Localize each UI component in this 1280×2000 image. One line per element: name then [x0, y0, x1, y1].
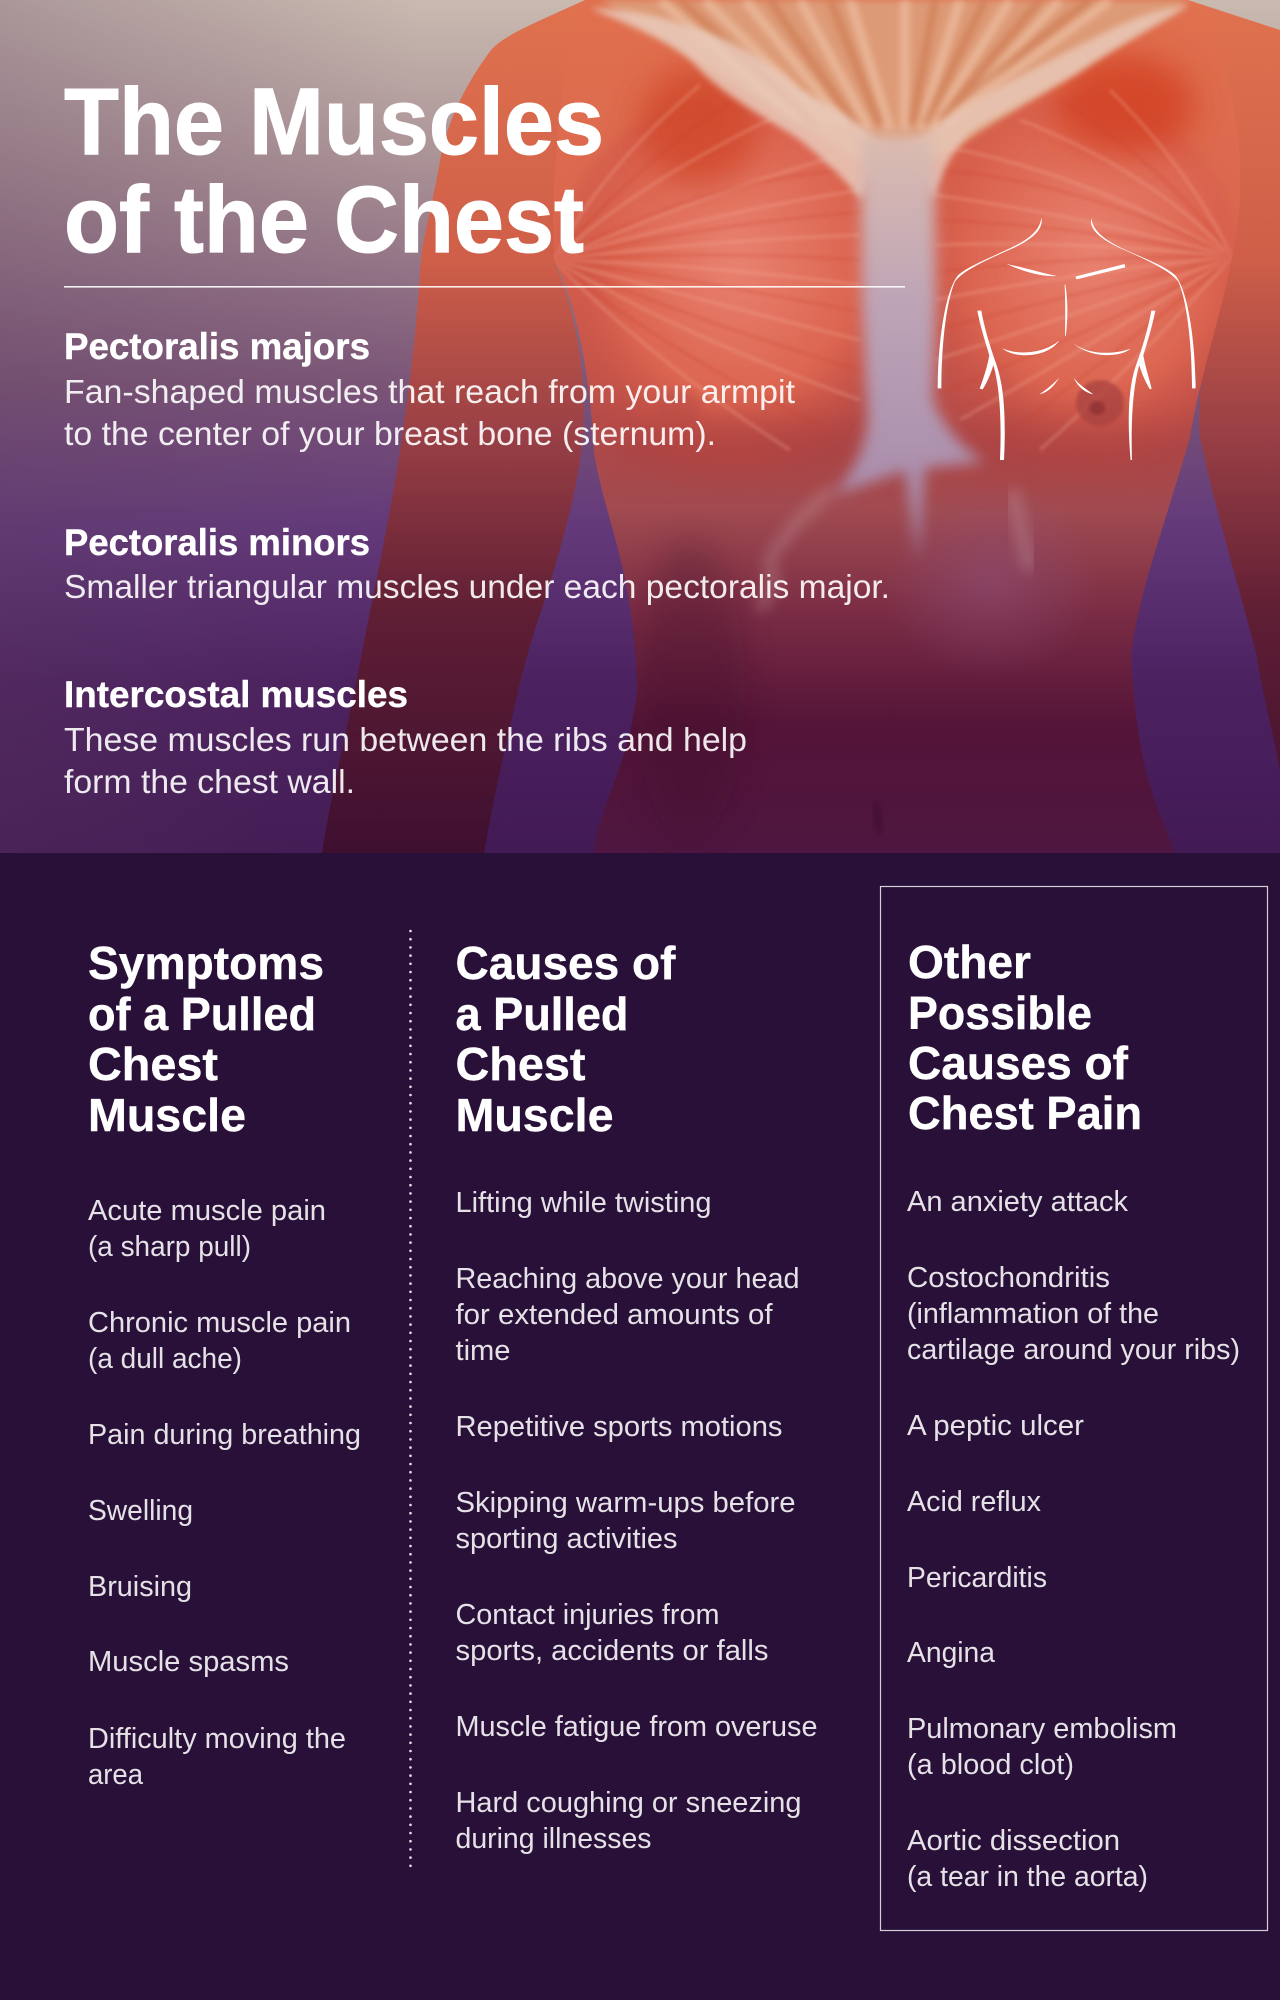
list: symptoms: Acute muscle pain [88, 1195, 326, 1227]
list: other causes: (inflammation of the [907, 1298, 1159, 1330]
list: symptoms: (a dull ache) [88, 1343, 242, 1375]
text block: pectoralis majors: to the center of your breast bone (sternum). [64, 415, 716, 452]
heading: other causes [908, 936, 1142, 1139]
list: causes: Contact injuries from [456, 1599, 720, 1631]
heading: other causes: Causes of [908, 1037, 1129, 1089]
list: causes: for extended amounts of [456, 1299, 773, 1331]
list: causes: Hard coughing or sneezing [456, 1787, 802, 1819]
list: symptoms: (a sharp pull) [88, 1231, 251, 1263]
heading: symptoms: Chest [88, 1038, 218, 1090]
heading: other causes: Chest Pain [908, 1087, 1142, 1139]
title: The Muscles [64, 69, 604, 175]
heading: other causes: Possible [908, 987, 1092, 1039]
list: other causes: cartilage around your ribs) [907, 1334, 1240, 1366]
text block: pectoralis majors [64, 326, 795, 452]
text block: pectoralis majors: Pectoralis majors [64, 326, 370, 367]
list: causes [456, 1187, 818, 1855]
divider rule [64, 286, 905, 288]
heading: causes: a Pulled [456, 988, 628, 1040]
text block: pectoralis minors [64, 522, 890, 605]
heading: causes: Chest [456, 1038, 586, 1090]
panel: anatomy hero [0, 0, 1280, 853]
heading: symptoms: Symptoms [88, 937, 324, 989]
list: other causes: Acid reflux [907, 1486, 1041, 1518]
list: causes: Skipping warm-ups before [456, 1487, 796, 1519]
list: other causes: A peptic ulcer [907, 1410, 1085, 1442]
list: causes: during illnesses [456, 1823, 652, 1855]
heading: symptoms [88, 937, 324, 1141]
box outline [880, 886, 1268, 1930]
list: causes: Repetitive sports motions [456, 1411, 782, 1443]
panel: causes column [456, 937, 818, 1855]
heading: causes: Muscle [456, 1089, 614, 1141]
title [64, 85, 601, 254]
list: other causes: Costochondritis [907, 1262, 1110, 1294]
list: symptoms: area [88, 1759, 143, 1791]
list: other causes [907, 1186, 1240, 1893]
list: causes: sports, accidents or falls [456, 1635, 768, 1667]
text block: intercostal muscles: Intercostal muscles [64, 674, 408, 715]
list: causes: time [456, 1335, 510, 1367]
list: symptoms: Pain during breathing [88, 1419, 361, 1451]
list: causes: Lifting while twisting [456, 1187, 712, 1219]
text block: pectoralis majors: Fan-shaped muscles that reach from your armpit [64, 373, 795, 410]
illustration: muscular torso [322, 0, 1280, 853]
panel: other causes box [880, 886, 1268, 1930]
list: other causes: An anxiety attack [907, 1186, 1129, 1218]
list: symptoms: Chronic muscle pain [88, 1307, 351, 1339]
list: causes: sporting activities [456, 1523, 678, 1555]
heading: causes [456, 937, 676, 1141]
background gradient [0, 0, 1280, 853]
list: symptoms: Muscle spasms [88, 1646, 289, 1678]
text block: pectoralis minors: Pectoralis minors [64, 522, 370, 563]
panel: symptoms column [88, 937, 361, 1791]
text block: pectoralis minors: Smaller triangular muscles under each pectoralis major. [64, 568, 890, 605]
icon: chest outline [938, 217, 1196, 460]
list: symptoms: Difficulty moving the [88, 1723, 346, 1755]
list: other causes: Pulmonary embolism [907, 1713, 1177, 1745]
list: other causes: (a blood clot) [907, 1749, 1074, 1781]
list: causes: Reaching above your head [456, 1263, 800, 1295]
heading: symptoms: Muscle [88, 1089, 246, 1141]
text block: intercostal muscles: These muscles run between the ribs and help [64, 721, 747, 758]
panel: lists background [0, 853, 1280, 2000]
list: symptoms: Bruising [88, 1571, 192, 1603]
list: other causes: Pericarditis [907, 1562, 1047, 1594]
text block: intercostal muscles [64, 674, 747, 800]
list: symptoms [88, 1195, 361, 1791]
list: other causes: Aortic dissection [907, 1825, 1120, 1857]
heading: other causes: Other [908, 936, 1031, 988]
list: other causes: Angina [907, 1637, 995, 1669]
text block: intercostal muscles: form the chest wall. [64, 763, 355, 800]
list: causes: Muscle fatigue from overuse [456, 1711, 818, 1743]
heading: causes: Causes of [456, 937, 676, 989]
list: symptoms: Swelling [88, 1495, 193, 1527]
list: other causes: (a tear in the aorta) [907, 1861, 1148, 1893]
dotted column divider [409, 931, 412, 1870]
title: of the Chest [64, 167, 584, 273]
heading: symptoms: of a Pulled [88, 988, 316, 1040]
